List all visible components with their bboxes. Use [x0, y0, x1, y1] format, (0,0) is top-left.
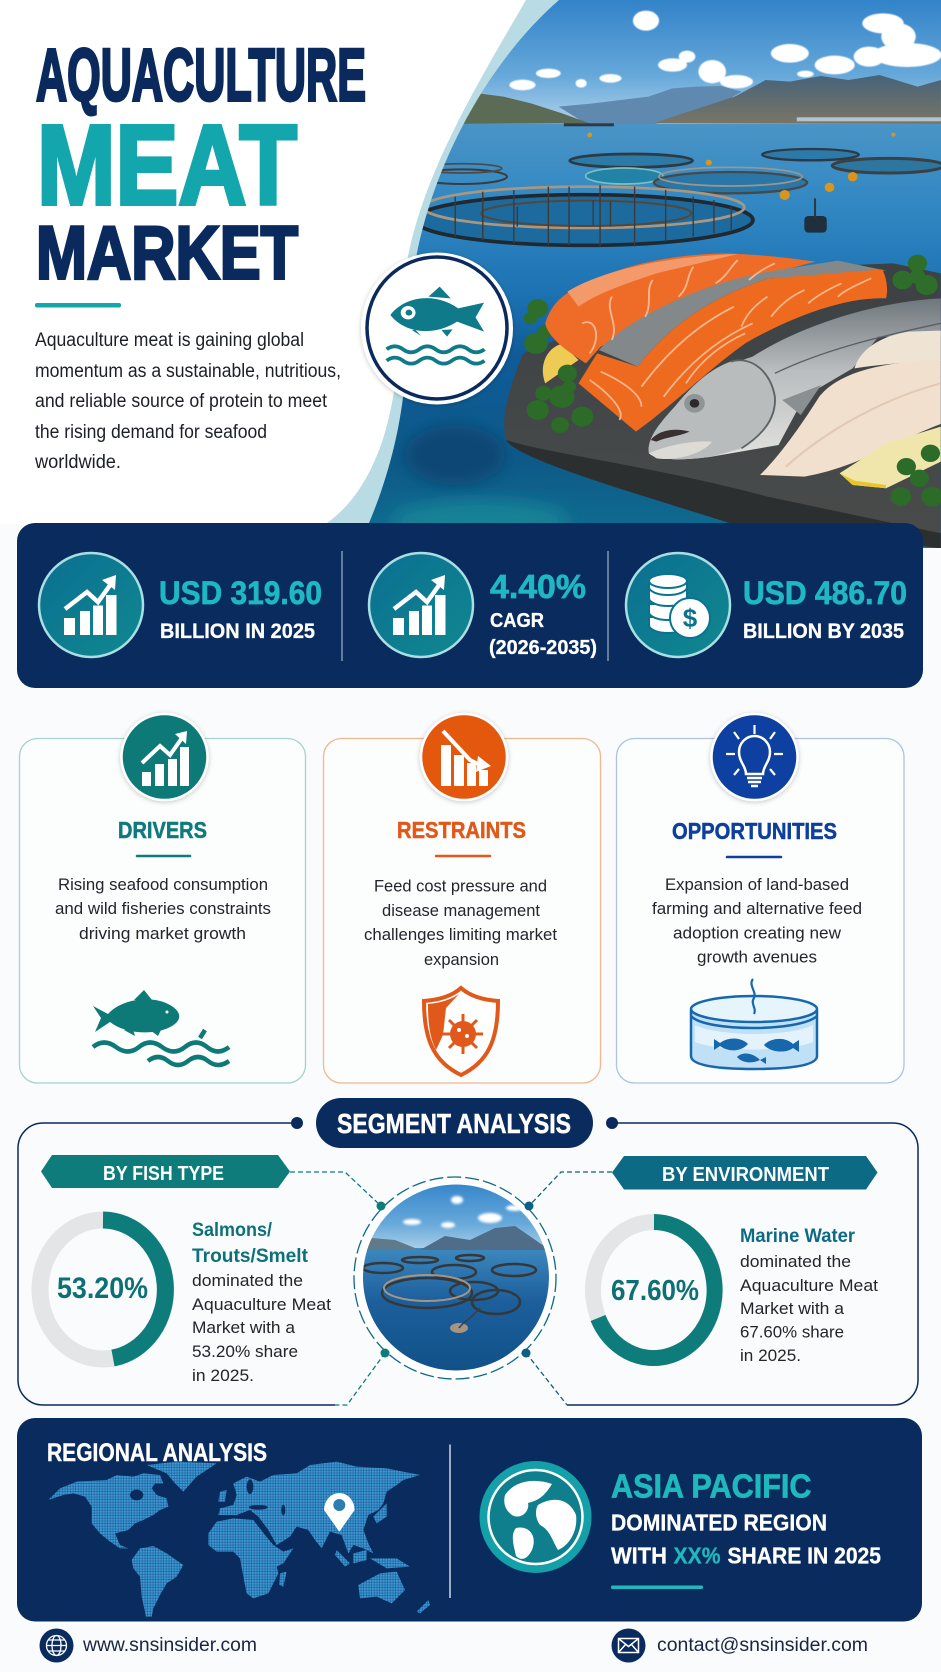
text: environment: [740, 1225, 878, 1365]
icon: globe: [480, 1461, 592, 1573]
text: fish type: Salmons/: [192, 1219, 273, 1241]
banner: by environment: [612, 1156, 878, 1190]
text: dominant region: XX%: [674, 1542, 720, 1568]
text: environment: Aquaculture Meat: [740, 1277, 878, 1295]
sky: [464, 0, 941, 124]
text block: and wild fisheries constraints: [55, 900, 271, 918]
text block: growth avenues: [697, 948, 817, 966]
whole fish: [649, 298, 941, 459]
salmon fillet back: [545, 253, 816, 363]
stat: market size 2025: [159, 575, 322, 643]
footer: email: [612, 1628, 868, 1662]
stat: market size 2035: [743, 575, 907, 643]
donut: environment: [593, 1222, 715, 1358]
icon: fish tank: [691, 979, 817, 1069]
text: environment: Market with a: [740, 1300, 845, 1318]
text: fish type: Aquaculture Meat: [192, 1296, 331, 1314]
text block: Rising seafood consumption: [58, 876, 268, 894]
panel: drivers: [20, 714, 306, 1083]
stat: CAGR: CAGR: [490, 610, 545, 632]
heading: OPPORTUNITIES: [672, 818, 837, 844]
donut: fish type: 53.20%: [57, 1272, 148, 1305]
buoys: [587, 133, 895, 200]
text: dominant region: WITH: [611, 1542, 667, 1568]
seafood platter: [504, 253, 941, 548]
outline frame: [18, 1123, 335, 1405]
text block: driving market growth: [79, 925, 246, 943]
icon: coins: [626, 553, 730, 657]
intro paragraph: the rising demand for seafood: [35, 422, 267, 443]
banner: by environment: BY ENVIRONMENT: [662, 1164, 829, 1186]
stat: CAGR: (2026-2035): [489, 637, 597, 659]
text block: expansion: [424, 951, 499, 969]
panel: restraints: [324, 714, 600, 1083]
salmon skin strip: [599, 261, 886, 367]
text block: [55, 876, 271, 943]
white fish fillets: [854, 331, 941, 368]
text: dominant region: DOMINATED REGION: [611, 1510, 827, 1536]
center photo: fish farm: [354, 1177, 556, 1380]
parsley front: [527, 365, 941, 507]
heading pill: SEGMENT ANALYSIS: [337, 1108, 571, 1139]
fish farm cages: [415, 149, 941, 247]
icon: map pin: [324, 1493, 355, 1532]
text: environment: dominated the: [740, 1253, 851, 1271]
heading: REGIONAL ANALYSIS: [47, 1439, 267, 1467]
donut: environment: 67.60%: [611, 1275, 699, 1307]
sea: [369, 124, 941, 548]
panel: opportunities: [616, 714, 904, 1083]
text: fish type: 53.20% share: [192, 1343, 298, 1361]
parsley back: [524, 255, 938, 354]
icon: shield with virus: [424, 988, 498, 1075]
lemon wedge left: [543, 344, 579, 383]
intro paragraph: [34, 330, 341, 473]
dotted world map: [48, 1462, 430, 1617]
icon: rising chart: [39, 553, 143, 657]
text: environment: Marine Water: [740, 1225, 855, 1247]
text: fish type: Market with a: [192, 1319, 296, 1337]
text block: disease management: [382, 902, 540, 920]
text: fish type: dominated the: [192, 1272, 303, 1290]
heading: DRIVERS: [118, 817, 207, 843]
text block: Feed cost pressure and: [374, 878, 547, 896]
lemon wedge right: [840, 427, 941, 488]
hero photo: sea farm and seafood platter: [300, 0, 941, 548]
panel: key stats band: [17, 523, 923, 688]
text: environment: 67.60% share: [740, 1324, 844, 1342]
clouds and mountains: [415, 11, 941, 247]
text block: [652, 876, 862, 966]
banner: by fish type: [41, 1155, 290, 1188]
title: MEAT: [37, 102, 297, 228]
icon: coins: $: [683, 603, 698, 633]
title underline: [35, 303, 121, 308]
white curve: [300, 0, 526, 548]
icon: fish badge: [361, 252, 513, 404]
icon: lightbulb: [712, 714, 798, 800]
text: dominant region: SHARE IN 2025: [728, 1542, 881, 1568]
panel: segment analysis: [18, 1098, 918, 1405]
text block: challenges limiting market: [364, 926, 557, 944]
stat: market size 2035: USD 486.70: [743, 575, 907, 611]
intro paragraph: momentum as a sustainable, nutritious,: [35, 361, 341, 382]
text block: [364, 878, 557, 969]
stat: market size 2025: USD 319.60: [159, 575, 322, 611]
text block: farming and alternative feed: [652, 900, 862, 918]
text: dominant region: [611, 1468, 881, 1568]
footer: website: www.snsinsider.com: [82, 1635, 257, 1656]
icon: drivers chart: [122, 714, 208, 800]
panel: regional analysis: [17, 1418, 922, 1622]
slate board: [504, 263, 941, 548]
salmon fillet front: [579, 269, 887, 432]
light strip: [327, 0, 559, 523]
intro paragraph: and reliable source of protein to meet: [35, 391, 328, 412]
text block: Expansion of land-based: [665, 876, 849, 894]
stat: CAGR: [489, 568, 597, 659]
text: fish type: in 2025.: [192, 1367, 254, 1385]
text: environment: in 2025.: [740, 1347, 801, 1365]
text: dominant region: ASIA PACIFIC: [611, 1468, 812, 1504]
title: MARKET: [36, 210, 298, 294]
heading: RESTRAINTS: [397, 817, 526, 843]
stat: CAGR: 4.40%: [490, 568, 586, 605]
heading pill: [316, 1098, 593, 1148]
icon: falling chart: [421, 714, 507, 800]
footer: website: [40, 1628, 257, 1662]
intro paragraph: worldwide.: [34, 452, 121, 473]
intro paragraph: Aquaculture meat is gaining global: [35, 330, 304, 351]
footer: email: contact@snsinsider.com: [657, 1635, 868, 1656]
icon: fish and waves: [93, 990, 229, 1065]
stat: market size 2025: BILLION IN 2025: [160, 620, 315, 643]
banner: by fish type: BY FISH TYPE: [103, 1163, 224, 1185]
text: fish type: [192, 1219, 331, 1385]
stat: market size 2035: BILLION BY 2035: [743, 620, 904, 643]
donut: fish type: [40, 1220, 166, 1359]
icon: rising chart 2: [369, 553, 473, 657]
title: [36, 34, 366, 294]
text block: adoption creating new: [673, 924, 841, 942]
title: AQUACULTURE: [36, 34, 366, 116]
text: fish type: Trouts/Smelt: [192, 1245, 308, 1267]
